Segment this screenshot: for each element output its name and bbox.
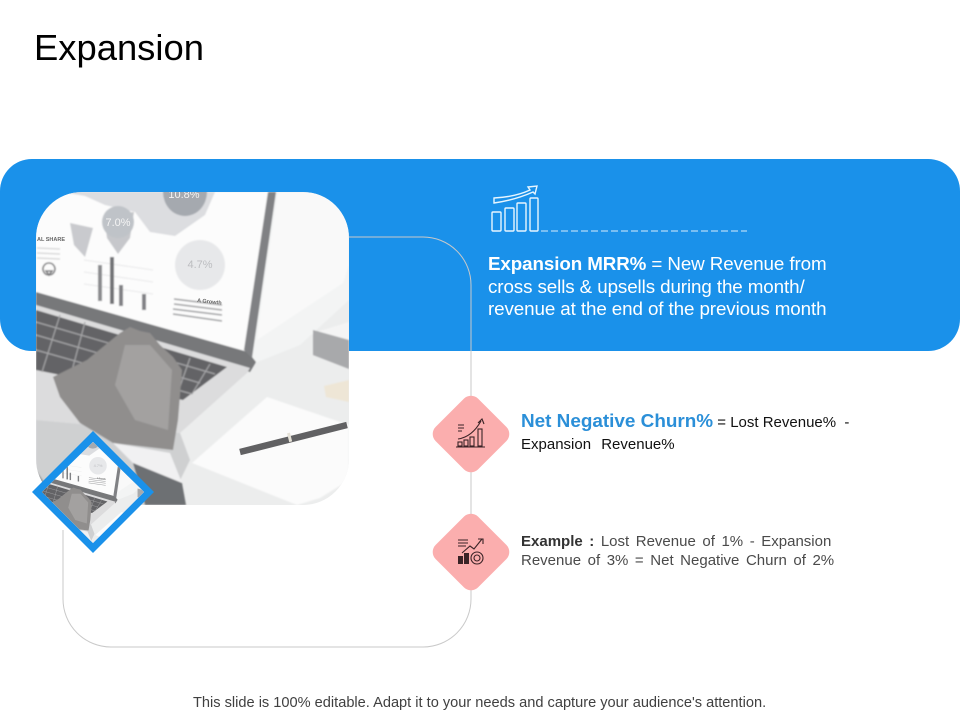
blue banner bbox=[0, 159, 960, 351]
photo: laptop on desk bbox=[36, 168, 349, 505]
banner formula text: revenue at the end of the previous month bbox=[488, 298, 826, 319]
banner formula text: cross sells & upsells during the month/ bbox=[488, 276, 805, 297]
diamond icon: example bbox=[429, 510, 513, 594]
diamond icon: net negative churn bbox=[429, 392, 513, 476]
net negative churn text bbox=[521, 411, 849, 452]
net negative churn text: Net Negative Churn% = Lost Revenue% - bbox=[521, 411, 849, 432]
footer note: This slide is 100% editable. Adapt it to your needs and capture your audience's attention. bbox=[193, 695, 766, 711]
dashed rule bbox=[541, 230, 747, 232]
net negative churn text: Expansion Revenue% bbox=[521, 436, 675, 452]
icon: growth chart on banner bbox=[492, 186, 538, 231]
diamond photo thumbnail bbox=[32, 431, 154, 553]
title: Expansion bbox=[34, 27, 204, 68]
banner formula text: Expansion MRR% = New Revenue from bbox=[488, 253, 827, 274]
example text: Example : Lost Revenue of 1% - Expansion bbox=[521, 533, 831, 550]
banner formula text bbox=[488, 253, 827, 319]
example text: Revenue of 3% = Net Negative Churn of 2% bbox=[521, 552, 834, 569]
graphic layer bbox=[0, 159, 960, 648]
example text bbox=[521, 533, 834, 569]
connector line bbox=[63, 237, 471, 647]
